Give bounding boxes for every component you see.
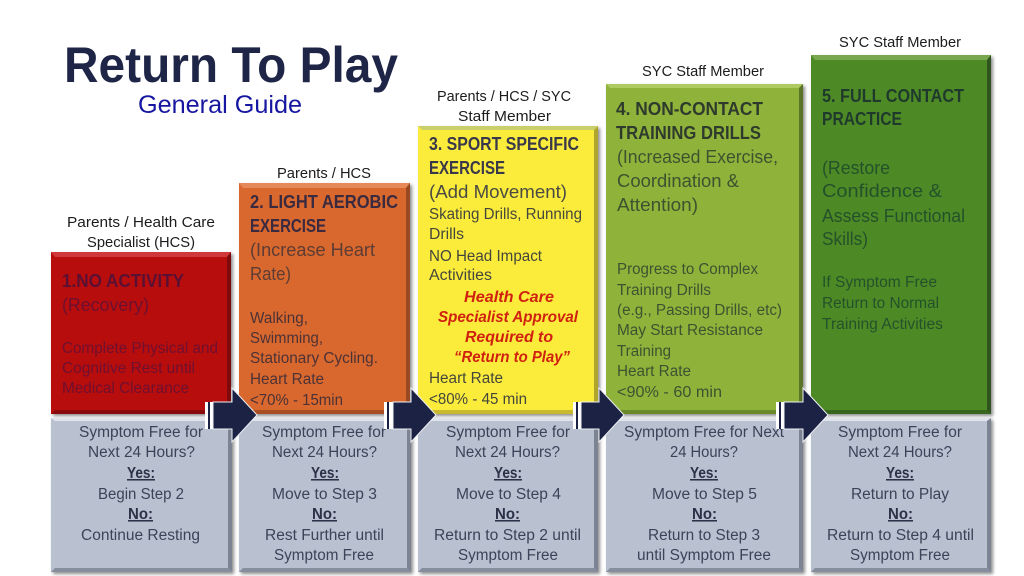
panel: step 5 symptom check: Symptom Free <box>850 547 950 564</box>
panel: step 4 non-contact training drills <box>606 84 803 414</box>
responsible: step 3 <box>437 88 571 125</box>
panel: step 5 full contact practice: If Symptom Free <box>822 274 937 291</box>
panel: step 2 light aerobic exercise: Walking, <box>250 310 308 327</box>
responsible: step 1: Specialist (HCS) <box>87 234 195 251</box>
panel: step 3 sport specific exercise: (Add Movement) <box>429 181 567 202</box>
panel: step 4 non-contact training drills: Training <box>617 343 671 360</box>
responsible: step 1: Parents / Health Care <box>67 214 215 231</box>
panel: step 2 symptom check: Symptom Free <box>274 547 374 564</box>
panel: step 2 symptom check: Next 24 Hours? <box>272 444 377 461</box>
panel: step 2 light aerobic exercise: 2. LIGHT AEROBIC <box>250 191 398 212</box>
subtitle: General Guide <box>138 91 302 119</box>
panel: step 2 light aerobic exercise: EXERCISE <box>250 215 326 236</box>
panel: step 5 full contact practice: Return to Normal <box>822 295 939 312</box>
panel: step 1 symptom check: Next 24 Hours? <box>88 444 195 461</box>
panel: step 5 full contact practice: 5. FULL CONTACT <box>822 85 965 106</box>
arrow: step 1 to step 2 <box>205 388 257 442</box>
callout: approval required: Required to <box>465 329 553 346</box>
panel: step 1 symptom check: Begin Step 2 <box>98 486 184 503</box>
panel: step 3 sport specific exercise: <80% - 45 min <box>429 391 527 408</box>
panel: step 2 light aerobic exercise <box>239 183 410 414</box>
panel: step 3 sport specific exercise: Heart Rate <box>429 370 503 387</box>
callout: approval required <box>438 289 579 366</box>
panel: step 1 no activity: (Recovery) <box>62 294 149 315</box>
panel: step 4 non-contact training drills: TRAINING DRILLS <box>616 122 761 143</box>
callout: approval required: Health Care <box>464 289 554 306</box>
panel: step 5 symptom check: Yes: <box>886 465 914 482</box>
responsible: step 4: SYC Staff Member <box>642 63 764 80</box>
panel: step 2 light aerobic exercise: (Increase Heart <box>250 239 375 260</box>
panel: step 5 symptom check: Return to Step 4 until <box>827 527 974 544</box>
panel: step 4 non-contact training drills: Heart Rate <box>617 363 691 380</box>
panel: step 5 full contact practice: Assess Functional <box>822 205 965 226</box>
responsible: step 3: Staff Member <box>458 108 551 125</box>
panel: step 4 non-contact training drills: (Increased Exercise, <box>617 146 778 167</box>
panel: step 5 symptom check <box>811 418 991 572</box>
panel: step 4 symptom check: Symptom Free for Next <box>624 424 785 441</box>
panel: step 2 symptom check: No: <box>312 506 337 523</box>
panel: step 2 light aerobic exercise: Heart Rate <box>250 371 324 388</box>
responsible: step 5: SYC Staff Member <box>839 34 961 51</box>
panel: step 5 symptom check: No: <box>888 506 913 523</box>
panel: step 4 non-contact training drills: Coordination & <box>617 170 740 191</box>
panel: step 2 symptom check: Yes: <box>311 465 339 482</box>
panel: step 3 symptom check <box>418 418 598 572</box>
panel: step 5 full contact practice: (Restore <box>822 157 890 178</box>
panel: step 1 no activity: 1.NO ACTIVITY <box>62 270 185 291</box>
panel: step 2 symptom check: Rest Further until <box>265 527 384 544</box>
arrow: step 3 to step 4 <box>573 388 624 442</box>
panel: step 3 sport specific exercise: Activities <box>429 267 492 284</box>
callout: approval required: Specialist Approval <box>438 309 579 326</box>
panel: step 4 symptom check <box>606 418 803 572</box>
panel: step 5 symptom check: Symptom Free for <box>838 424 962 441</box>
panel: step 3 sport specific exercise: EXERCISE <box>429 157 505 178</box>
panel: step 1 symptom check: Symptom Free for <box>79 424 203 441</box>
panel: step 3 symptom check: Symptom Free <box>458 547 558 564</box>
panel: step 2 light aerobic exercise: Rate) <box>250 263 291 284</box>
panel: step 4 symptom check: No: <box>692 506 717 523</box>
panel: step 4 symptom check: 24 Hours? <box>670 444 738 461</box>
responsible: step 3: Parents / HCS / SYC <box>437 88 571 105</box>
panel: step 4 symptom check: Return to Step 3 <box>648 527 760 544</box>
panel: step 5 symptom check: Next 24 Hours? <box>848 444 952 461</box>
panel: step 2 light aerobic exercise: <70% - 15min <box>250 392 343 409</box>
panel: step 5 symptom check: Return to Play <box>851 486 949 503</box>
panel: step 3 sport specific exercise: Drills <box>429 226 464 243</box>
panel: step 4 non-contact training drills: <90% - 60 min <box>617 384 722 401</box>
panel: step 1 no activity: Cognitive Rest until <box>62 360 195 377</box>
panel: step 4 non-contact training drills: 4. NON-CONTACT <box>616 98 764 119</box>
panel: step 4 symptom check: Move to Step 5 <box>652 486 757 503</box>
panel: step 1 symptom check <box>51 418 232 572</box>
panel: step 1 symptom check: No: <box>128 506 153 523</box>
panel: step 2 symptom check: Symptom Free for <box>262 424 386 441</box>
panel: step 1 no activity: Medical Clearance <box>62 380 189 397</box>
panel: step 3 sport specific exercise: Skating Drills, Running <box>429 206 582 223</box>
panel: step 3 symptom check: Yes: <box>494 465 522 482</box>
panel: step 4 symptom check: until Symptom Free <box>637 547 771 564</box>
panel: step 4 non-contact training drills: (e.g., Passing Drills, etc) <box>617 302 782 319</box>
panel: step 2 light aerobic exercise: Stationary Cycling. <box>250 350 378 367</box>
arrow: step 2 to step 3 <box>384 388 436 442</box>
panel: step 3 symptom check: No: <box>495 506 520 523</box>
panel: step 3 symptom check: Move to Step 4 <box>456 486 561 503</box>
panel: step 1 symptom check: Continue Resting <box>81 527 200 544</box>
panel: step 5 full contact practice <box>811 55 991 414</box>
panel: step 3 symptom check: Return to Step 2 until <box>434 527 581 544</box>
panel: step 4 symptom check: Yes: <box>690 465 718 482</box>
panel: step 3 symptom check: Next 24 Hours? <box>455 444 560 461</box>
callout: approval required: “Return to Play” <box>454 349 570 366</box>
title: Return To Play <box>64 37 398 93</box>
panel: step 5 full contact practice: Skills) <box>822 228 868 249</box>
panel: step 2 symptom check <box>239 418 411 572</box>
panel: step 1 symptom check: Yes: <box>127 465 155 482</box>
responsible: step 1 <box>67 214 215 251</box>
panel: step 3 symptom check: Symptom Free for <box>446 424 570 441</box>
panel: step 4 non-contact training drills: Training Drills <box>617 282 711 299</box>
panel: step 2 symptom check: Move to Step 3 <box>272 486 377 503</box>
panel: step 4 non-contact training drills: May Start Resistance <box>617 322 763 339</box>
panel: step 3 sport specific exercise: NO Head Impact <box>429 248 543 265</box>
panel: step 5 full contact practice: Training Activities <box>822 316 943 333</box>
arrow: step 4 to step 5 <box>776 388 828 442</box>
panel: step 4 non-contact training drills: Attention) <box>617 194 698 215</box>
panel: step 4 non-contact training drills: Progress to Complex <box>617 261 758 278</box>
panel: step 5 full contact practice: PRACTICE <box>822 108 902 129</box>
panel: step 5 full contact practice: Confidence & <box>822 180 943 201</box>
responsible: step 2: Parents / HCS <box>277 165 371 182</box>
panel: step 2 light aerobic exercise: Swimming, <box>250 330 323 347</box>
panel: step 3 sport specific exercise: 3. SPORT SPECIFIC <box>429 133 579 154</box>
panel: step 3 sport specific exercise <box>418 126 598 414</box>
panel: step 1 no activity: Complete Physical and <box>62 340 218 357</box>
panel: step 1 no activity <box>51 252 231 414</box>
